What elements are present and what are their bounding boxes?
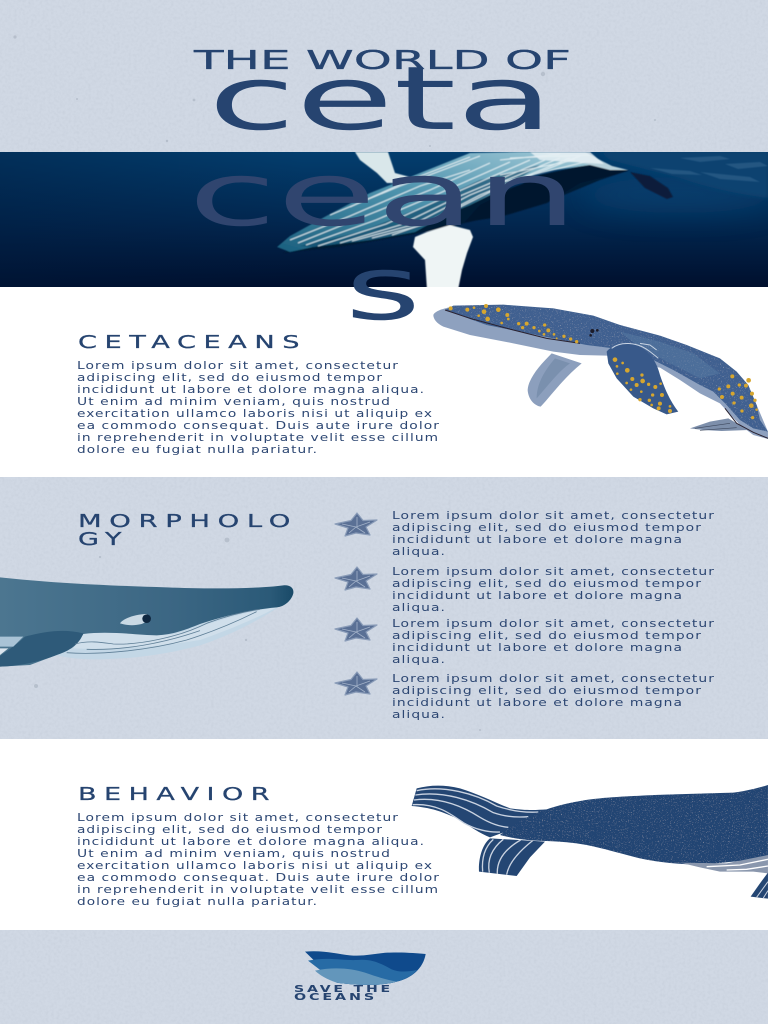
title — [188, 46, 578, 340]
flipper — [607, 344, 678, 414]
illustration: blue whale head — [0, 577, 293, 667]
text block: behavior: dolore eu fugiat nulla pariatur. — [77, 896, 318, 908]
lower jaw — [57, 607, 278, 659]
text block: morphology 4 — [392, 673, 715, 721]
panel: morphology paper — [0, 477, 768, 739]
upper flipper — [355, 152, 410, 183]
text block: behavior: ea commodo consequat. Duis aute irure dolor — [77, 872, 440, 884]
text block: morphology 1: aliqua. — [392, 546, 446, 558]
icon: starfish 3 — [335, 618, 377, 641]
upper fluke — [412, 786, 547, 837]
title line: the world of: THE WORLD OF — [192, 46, 571, 76]
panel: footer paper — [0, 930, 768, 1024]
text block: behavior: Ut enim ad minim veniam, quis nostrud — [77, 848, 391, 860]
body — [277, 152, 612, 252]
panel: whale photo — [0, 152, 768, 290]
text block: morphology 3: Lorem ipsum dolor sit amet, consectetur — [392, 618, 715, 630]
heading: morphology — [78, 511, 298, 550]
text block: morphology 4: adipiscing elit, sed do eiusmod tempor — [392, 685, 702, 697]
icon: starfish 2 — [335, 567, 377, 590]
text block: morphology 1: adipiscing elit, sed do eiusmod tempor — [392, 522, 702, 534]
panel: behavior white — [0, 739, 768, 930]
title line: ceta: ceta — [208, 47, 554, 150]
logo icon: waves — [305, 951, 426, 985]
text block: cetaceans: Lorem ipsum dolor sit amet, consectetur — [77, 360, 399, 372]
text block: cetaceans: ea commodo consequat. Duis aute irure dolor — [77, 420, 440, 432]
text block: morphology 2: adipiscing elit, sed do eiusmod tempor — [392, 578, 702, 590]
dark groove band — [300, 165, 540, 247]
text block: cetaceans: adipiscing elit, sed do eiusmod tempor — [77, 372, 383, 384]
text block: behavior: exercitation ullamco laboris nisi ut aliquip ex — [77, 860, 433, 872]
text block: behavior: adipiscing elit, sed do eiusmod tempor — [77, 824, 383, 836]
text block: morphology 4: incididunt ut labore et dolore magna — [392, 697, 683, 709]
fluke — [630, 172, 673, 199]
text block: morphology 1: Lorem ipsum dolor sit amet, consectetur — [392, 510, 715, 522]
jaw grooves — [67, 609, 260, 653]
shadow under whale — [283, 170, 630, 253]
text block: morphology 3: adipiscing elit, sed do eiusmod tempor — [392, 630, 702, 642]
text block: behavior: in reprehenderit in voluptate velit esse cillum — [77, 884, 439, 896]
logo: save the oceans — [294, 951, 426, 1003]
text block: cetaceans — [77, 360, 440, 456]
text block: morphology 4: aliqua. — [392, 709, 446, 721]
heading: cetaceans: CETACEANS — [78, 332, 307, 353]
text block: behavior: Lorem ipsum dolor sit amet, consectetur — [77, 812, 399, 824]
heading: behavior: BEHAVIOR — [78, 784, 277, 805]
text block: cetaceans: Ut enim ad minim veniam, quis nostrud — [77, 396, 391, 408]
text block: morphology 3: aliqua. — [392, 654, 446, 666]
pectoral fin — [0, 631, 83, 667]
logo: save the oceans: OCEANS — [294, 992, 377, 1003]
dark belly — [478, 164, 627, 220]
tail — [690, 418, 748, 431]
back — [445, 305, 768, 432]
lower fluke — [479, 838, 545, 876]
body — [500, 785, 768, 865]
text block: morphology 1 — [392, 510, 715, 558]
panel: cetaceans white — [0, 287, 768, 477]
text block: morphology 1: incididunt ut labore et dolore magna — [392, 534, 683, 546]
heading: morphology: MORPHOLO — [78, 511, 298, 532]
heading: morphology: GY — [78, 529, 129, 550]
far fin — [528, 353, 582, 407]
second fin — [751, 873, 768, 899]
belly — [433, 307, 768, 439]
icon: starfish 4 — [335, 672, 377, 695]
text block: behavior — [77, 812, 440, 908]
eye — [120, 614, 151, 625]
illustration: spotted whale — [433, 304, 768, 439]
text block: morphology 4: Lorem ipsum dolor sit amet, consectetur — [392, 673, 715, 685]
text block: cetaceans: incididunt ut labore et dolore magna aliqua. — [77, 384, 425, 396]
panel: header paper — [0, 0, 768, 152]
icon: starfish 1 — [335, 513, 377, 536]
text block: morphology 2: Lorem ipsum dolor sit amet, consectetur — [392, 566, 715, 578]
text block: behavior: incididunt ut labore et dolore magna aliqua. — [77, 836, 425, 848]
title line: cean: cean — [188, 143, 578, 246]
text block: morphology 2 — [392, 566, 715, 614]
text block: morphology 3: incididunt ut labore et dolore magna — [392, 642, 683, 654]
text block: cetaceans: exercitation ullamco laboris nisi ut aliquip ex — [77, 408, 433, 420]
illustration: whale tail — [412, 785, 768, 899]
eye spots — [589, 329, 599, 337]
lower flipper — [413, 225, 473, 290]
belly stripes — [680, 855, 768, 873]
text block: morphology 2: aliqua. — [392, 602, 446, 614]
text block: cetaceans: dolore eu fugiat nulla pariatur. — [77, 444, 318, 456]
logo text: SAVE THE — [294, 984, 393, 995]
upper body — [0, 577, 293, 667]
gold spots — [449, 304, 758, 419]
title line: s: s — [345, 237, 421, 340]
text block: cetaceans: in reprehenderit in voluptate velit esse cillum — [77, 432, 439, 444]
text block: morphology 3 — [392, 618, 715, 666]
text block: morphology 2: incididunt ut labore et dolore magna — [392, 590, 683, 602]
